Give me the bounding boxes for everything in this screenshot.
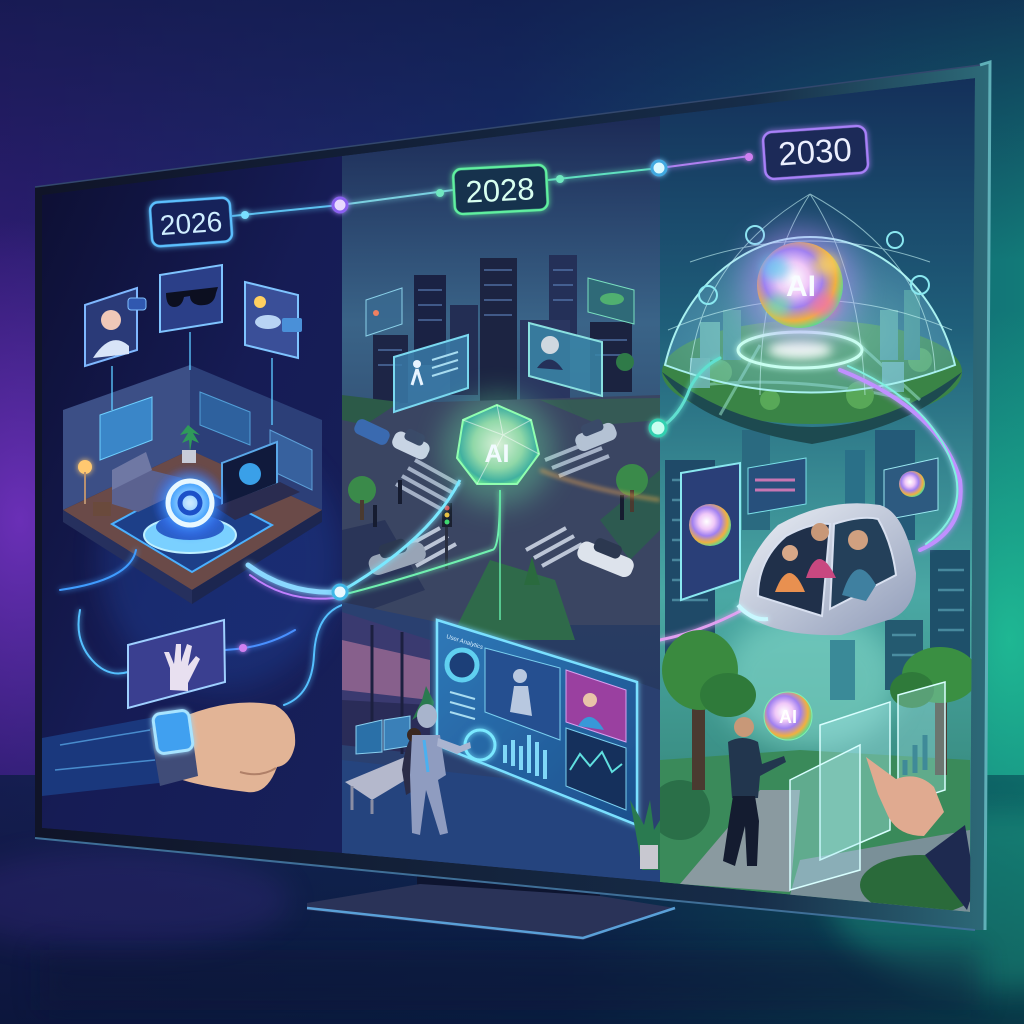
trees and signals: [348, 353, 648, 585]
flowing light streams: [60, 550, 342, 705]
small AI orb: [764, 692, 812, 740]
TV frame: [35, 62, 990, 930]
plant by the wall: [630, 800, 660, 870]
robot: [410, 704, 495, 835]
panel dividers: [341, 116, 660, 882]
person walking: [723, 717, 786, 866]
cars: [352, 414, 639, 579]
year label 2030: 2030: [777, 130, 853, 173]
timeline nodes: [239, 153, 753, 652]
streets and crossing: [342, 395, 660, 640]
icon: support agent card: [85, 288, 146, 366]
hand hologram card: [128, 620, 225, 708]
icon: smart glasses card: [160, 265, 222, 332]
glass screens: [790, 682, 945, 890]
park ground: [650, 750, 980, 915]
small AI orb: AI: [779, 707, 797, 727]
AI rainbow sphere: AI: [786, 270, 816, 303]
office room: [342, 602, 660, 882]
TV stand: [307, 870, 675, 940]
AI analytics dashboard: [437, 620, 637, 825]
panel: 2026 smart home: [42, 156, 342, 853]
flowing stream: [660, 358, 961, 640]
hand pointing: [866, 757, 975, 910]
year label 2028: [453, 165, 548, 214]
panel: 2030 AI city: [650, 78, 980, 915]
hologram swirl: [144, 465, 236, 553]
holographic connectors: [112, 332, 272, 425]
skyline: [373, 255, 632, 410]
AI crystal orb: [340, 394, 660, 595]
self-driving pod: [738, 503, 916, 635]
panel: 2028 smart city: [340, 116, 660, 882]
smartwatch on wrist: [42, 702, 295, 796]
AI rainbow sphere: [738, 227, 862, 368]
isometric room: [63, 365, 322, 604]
timeline connector: [232, 156, 750, 216]
holographic signs: [366, 278, 634, 412]
year label 2028: 2028: [465, 171, 535, 210]
AI crystal orb: AI: [484, 440, 510, 468]
year label 2030: [763, 125, 869, 179]
park trees: [662, 630, 978, 790]
lower skyline: [665, 430, 970, 700]
AI analytics dashboard: User Analytics: [445, 634, 484, 651]
year label 2026: [150, 197, 232, 247]
year label 2026: 2026: [159, 206, 223, 241]
floating displays: [681, 458, 938, 600]
dome terrain: [662, 320, 962, 444]
dome city: [690, 290, 920, 392]
icon: weather card: [245, 282, 302, 358]
glass dome: [665, 194, 955, 395]
